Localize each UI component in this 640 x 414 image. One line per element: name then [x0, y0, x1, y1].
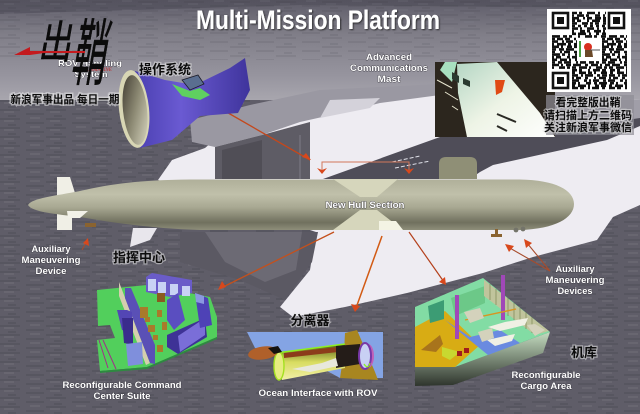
blue strip	[445, 320, 520, 355]
hull	[415, 332, 550, 386]
label: auxiliary maneuvering devices: Maneuvering	[546, 275, 604, 285]
label: operating system: 操作系统	[139, 62, 191, 77]
deck	[415, 278, 550, 367]
tan seats	[140, 307, 167, 352]
tagline: 新浪军事出品 每日一期	[11, 93, 119, 106]
arrow to ocean interface	[351, 236, 382, 312]
label: advanced communications mast: Mast	[378, 74, 400, 84]
side fin	[67, 211, 88, 218]
yellow floor	[415, 311, 480, 367]
storage racks	[428, 300, 444, 323]
label: auxiliary maneuvering devices: Devices	[558, 286, 592, 296]
tan console	[157, 293, 165, 302]
logo background english text: ROV Handling	[58, 58, 122, 68]
auxiliary maneuvering devices	[85, 223, 502, 237]
panel: reconfigurable cargo area	[415, 275, 550, 386]
logo: Chu Qiao: SUBMARINE	[84, 68, 112, 73]
logo character chu: 出	[36, 19, 78, 68]
label: command center: 指挥中心	[113, 250, 165, 265]
label: auxiliary maneuvering device: Maneuvering	[22, 255, 80, 265]
arrow to stern device	[82, 238, 89, 250]
WeChat scan caption: 请扫描上方二维码	[544, 108, 632, 122]
right console cluster	[167, 293, 185, 330]
sail	[439, 157, 477, 179]
label: auxiliary maneuvering devices	[546, 264, 604, 296]
label: advanced communications mast: Advanced	[366, 52, 412, 62]
tan frame	[340, 330, 378, 380]
new hull section panels	[333, 179, 403, 230]
brown strip	[284, 346, 347, 358]
brown cap	[247, 344, 279, 362]
back row consoles	[146, 273, 192, 297]
arrow to command center	[218, 232, 334, 290]
label: hangar: 机库	[571, 345, 597, 360]
elbow arrows to hull	[317, 162, 414, 174]
orange rail	[465, 309, 516, 320]
panel: command center suite	[97, 273, 217, 373]
logo: Chu Qiao	[14, 15, 122, 95]
lens	[362, 344, 374, 368]
panel: operating system bell	[115, 58, 250, 149]
label: ocean interface: Ocean Interface with ROV	[258, 388, 378, 398]
red boxes	[457, 348, 469, 356]
yellow fan	[421, 335, 443, 352]
hull body	[28, 180, 574, 230]
blue background	[247, 332, 383, 378]
green tube	[276, 344, 345, 380]
label: auxiliary maneuvering device	[22, 244, 80, 276]
QR center logo	[577, 38, 602, 60]
WeChat scan caption	[544, 95, 634, 135]
title: Multi-Mission Platform	[196, 5, 440, 35]
logo character qiao: 鞘	[67, 15, 116, 95]
label: advanced communications mast: Communications	[350, 63, 428, 73]
red antenna	[495, 80, 505, 95]
label: cargo area: Cargo Area	[520, 381, 573, 391]
background submarine sail in the wake	[215, 122, 430, 179]
label: auxiliary maneuvering device: Device	[36, 266, 66, 276]
white sail surface	[457, 62, 555, 137]
label: cargo area: Reconfigurable	[512, 370, 580, 380]
arrows to auxiliary devices	[505, 239, 550, 271]
logo: Chu Qiao: System	[74, 69, 108, 79]
lower console row	[167, 318, 207, 354]
control device	[182, 75, 204, 90]
submarine hull	[28, 157, 574, 237]
green deck	[172, 84, 210, 100]
label: advanced communications mast	[350, 52, 428, 84]
label: command center suite: Center Suite	[94, 391, 150, 401]
label: command center suite	[62, 380, 182, 401]
label: auxiliary maneuvering device: Auxiliary	[32, 244, 70, 254]
arrow to sail	[223, 110, 311, 160]
QR finder squares	[553, 13, 624, 88]
label: auxiliary maneuvering devices: Auxiliary	[556, 264, 594, 274]
mesh wall	[484, 280, 549, 335]
logo red arrow	[14, 47, 85, 55]
upper stern fin	[57, 177, 75, 198]
WeChat scan caption: 看完整版出鞘	[556, 95, 621, 109]
central partition wall	[119, 282, 150, 365]
dark section	[336, 344, 360, 368]
QR code	[547, 9, 631, 92]
background: white wake foam	[130, 84, 640, 317]
ROV vehicle	[292, 358, 338, 372]
WeChat scan caption: 关注新浪军事微信	[544, 120, 632, 134]
label: command center suite: Reconfigurable Command	[62, 380, 182, 390]
left workstations	[117, 310, 132, 333]
label: cargo area	[512, 370, 580, 391]
label: separator: 分离器	[290, 313, 330, 328]
panel: advanced communications mast	[435, 62, 555, 137]
bell mouth	[115, 69, 153, 149]
label: new hull section: New Hull Section	[326, 200, 404, 210]
lower stern fin	[57, 214, 72, 230]
panel: ocean interface with ROV	[247, 330, 383, 380]
green floor	[97, 285, 217, 371]
purple posts	[457, 275, 503, 339]
ROV vehicles	[487, 318, 528, 346]
arrow to cargo area	[409, 232, 446, 285]
arrows	[82, 110, 550, 312]
mint left section	[440, 62, 457, 82]
